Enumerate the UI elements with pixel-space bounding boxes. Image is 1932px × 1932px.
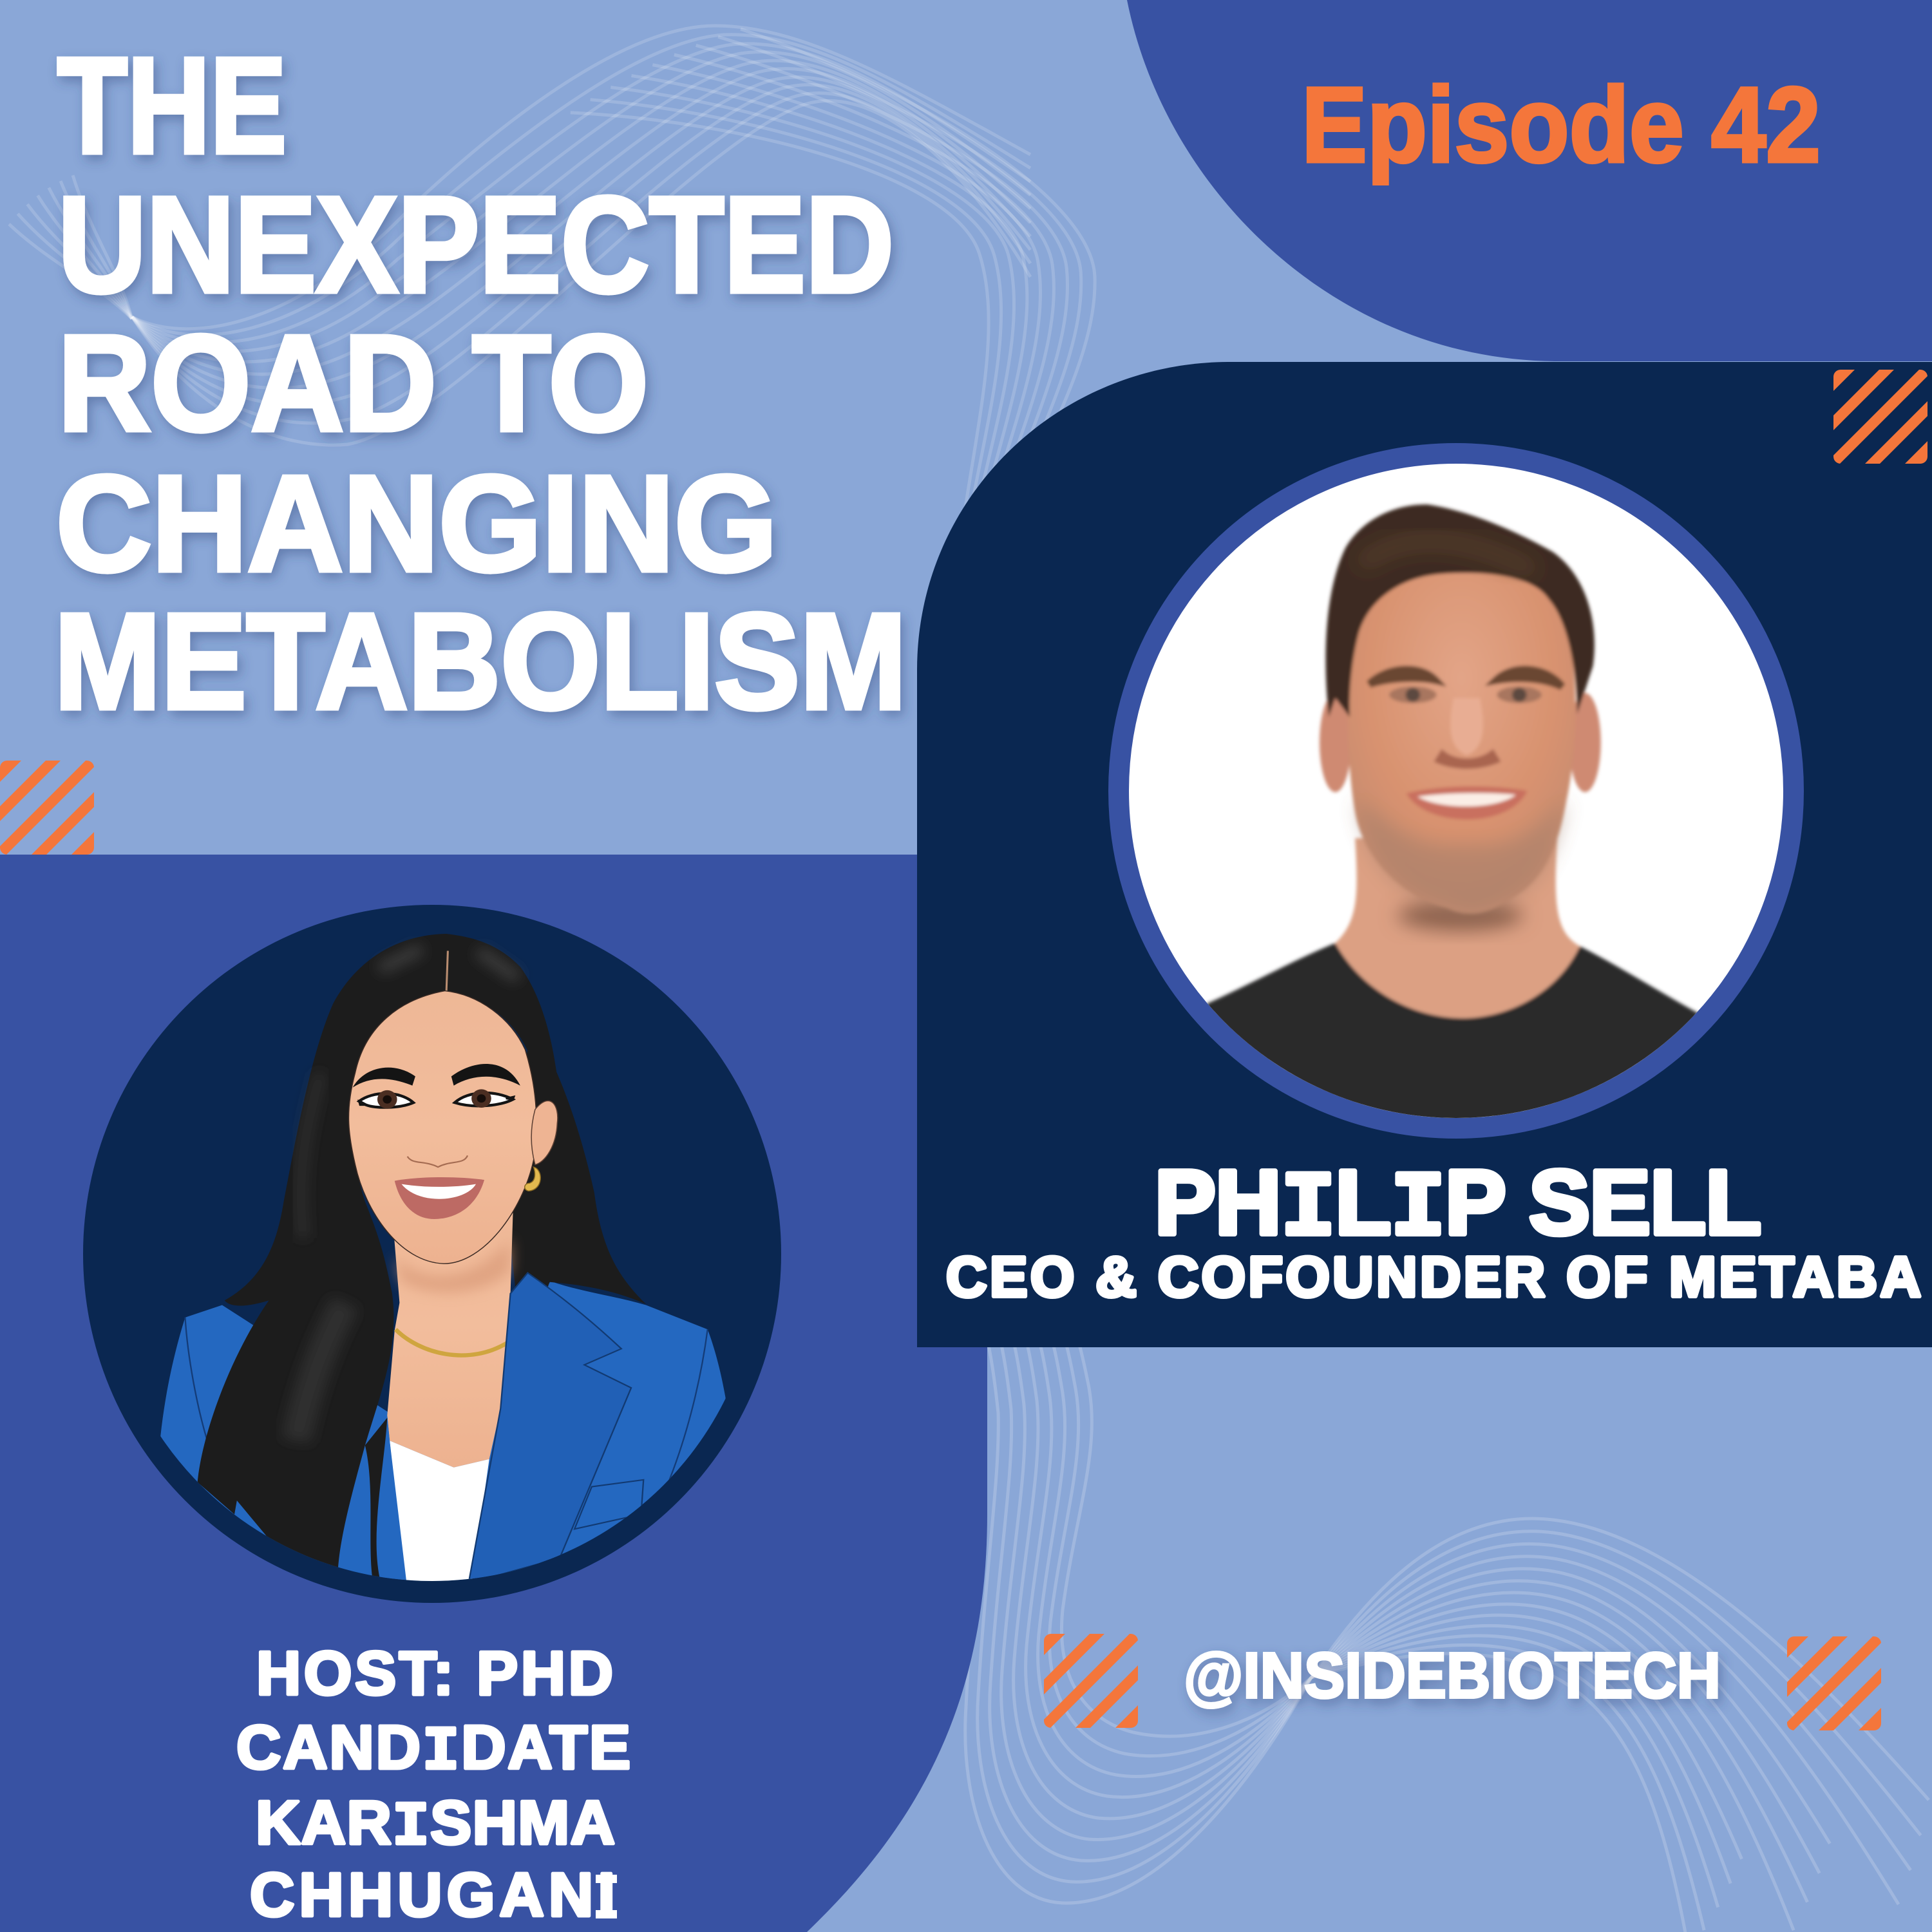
panel: host [0,855,987,1932]
host caption: HOST: PHD [256,1639,613,1708]
guest name: PHILIP SELL [1155,1151,1761,1262]
guest portrait [1119,453,1794,1150]
stripe accent: right of handle [1787,1636,1881,1730]
title: THE [57,29,287,182]
stripe accent: guest panel corner [1833,370,1927,464]
host caption [236,1639,630,1929]
title: CHANGING [56,447,777,600]
panel: episode badge [1127,0,1932,361]
stripe accent: left of title [0,761,94,855]
title [54,29,907,737]
background wave pattern: bottom [965,1314,1932,1932]
title: METABOLISM [54,585,907,737]
panel: guest [917,362,1932,1347]
portrait backdrop [83,905,781,1603]
portrait ring [1119,453,1794,1128]
title: UNEXPECTED [58,168,894,321]
social handle: @INSIDEBIOTECH [1184,1640,1721,1712]
stripe accent: left of handle [1044,1634,1138,1728]
host portrait [83,905,781,1606]
host caption: KARISHMA [256,1788,615,1862]
host caption: CANDIDATE [236,1713,630,1787]
episode number: Episode 42 [1302,66,1821,185]
title: ROAD TO [58,307,649,459]
background wave pattern: top [9,14,1095,735]
guest role: CEO & COFOUNDER OF METABA [946,1245,1921,1309]
host caption: CHHUGANI [250,1861,615,1929]
host illustration [160,934,727,1606]
guest photo [1206,501,1699,1118]
